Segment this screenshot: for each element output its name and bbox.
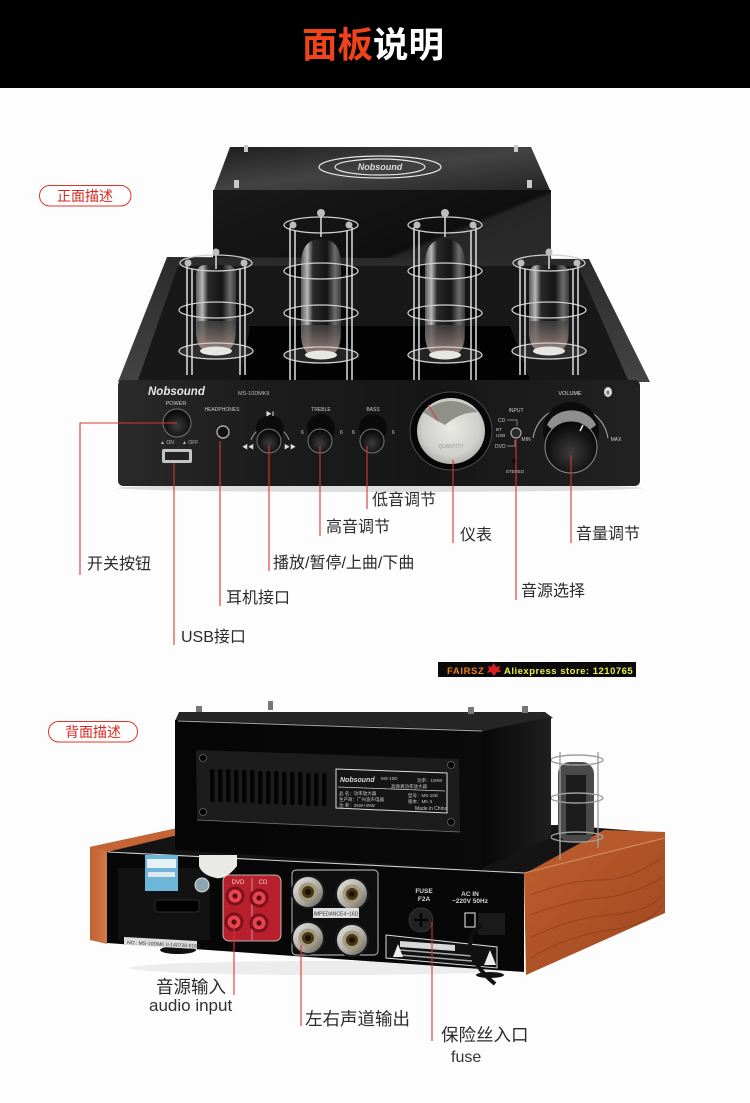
serial label: NO.: MS-10DMK II-140728-0163 (127, 940, 200, 950)
callout: speaker output: 左右声道输出 (305, 1009, 410, 1029)
nameplate: 型号：MS-10D (408, 792, 439, 799)
callout: treble: 高音调节 (326, 518, 390, 536)
rear panel (107, 852, 524, 972)
transformer front (175, 720, 482, 870)
callout: playback: 播放/暂停/上曲/下曲 (273, 554, 414, 572)
vacuum tube 2 (284, 209, 358, 380)
small tube (551, 752, 603, 860)
transformer box front (213, 190, 551, 326)
power knob (160, 401, 198, 446)
play knob: ▶‖ (266, 411, 274, 418)
input selector: USB (496, 433, 505, 438)
callout: fuse: 保险丝入口 (441, 1025, 528, 1045)
store banner (438, 662, 636, 677)
VU meter (410, 392, 492, 470)
handle slot (155, 900, 199, 912)
fuse holder (409, 888, 433, 932)
bass knob: BASS (366, 407, 380, 413)
nameplate: Nobsound (340, 777, 375, 784)
USB port (162, 449, 192, 463)
nameplate: 生产商：广州波声电器 (339, 796, 384, 803)
bluetooth badge (604, 387, 612, 397)
input selector: INPUT (508, 408, 524, 414)
input selector: DVD (495, 444, 506, 450)
callout: audio input: 音源输入 (156, 977, 226, 997)
input selector: BT (496, 427, 502, 432)
power cable (470, 925, 495, 984)
front amplifier photo (118, 145, 650, 492)
play knob: ◀◀ (242, 444, 254, 451)
transformer box top: Nobsound (358, 162, 403, 172)
rear amplifier photo (90, 701, 665, 984)
speaker terminals panel (291, 870, 378, 957)
callout: USB: USB接口 (181, 628, 246, 646)
callout: meter (453, 460, 492, 544)
play knob (242, 411, 296, 453)
bass knob: 6 (352, 430, 355, 436)
front panel: MS-10DMKII (238, 391, 270, 397)
volume knob: VOLUME (558, 391, 582, 397)
callout: meter: 仪表 (460, 526, 492, 544)
vacuum tube 3 (408, 209, 482, 380)
wood side right (524, 838, 665, 975)
vacuum tube 4 (512, 248, 586, 375)
callout: fuse: fuse (451, 1049, 481, 1066)
vent slots (210, 769, 326, 806)
nameplate: 版本：MK II (408, 798, 432, 805)
vent plate (196, 750, 460, 832)
AC inlet: AC IN (461, 891, 479, 898)
bluetooth badge: ʙ (606, 390, 610, 396)
VU meter: QUANTITY (438, 444, 464, 450)
front panel (118, 380, 640, 486)
treble knob: 6 (301, 430, 304, 436)
audio input panel (223, 875, 281, 941)
store banner: FAIRSZ (447, 666, 484, 677)
input selector: STEREO (506, 469, 525, 474)
shadow under amp (118, 484, 642, 492)
callout: volume (571, 455, 640, 543)
volume knob: MAX (611, 437, 622, 443)
callout: power button: 开关按钮 (87, 555, 151, 573)
callout: headphone jack: 耳机接口 (226, 589, 290, 607)
nameplate: 功率：100W (417, 777, 443, 784)
rear chassis top and wood (90, 825, 665, 873)
audio input panel: DVD (232, 880, 245, 886)
speaker terminals panel: IMPEDANCE4~16Ω (314, 912, 359, 918)
callout: audio input (149, 925, 234, 1015)
transformer top (175, 712, 553, 731)
nameplate: MS-10D (381, 776, 398, 781)
tag: rear description: 背面描述 (65, 724, 121, 740)
callout: treble (320, 446, 390, 536)
treble knob: TREBLE (311, 407, 331, 413)
callout: bass (367, 446, 436, 509)
volume knob: MIN (521, 437, 531, 443)
treble knob (301, 407, 343, 453)
audio input panel: CD (259, 880, 268, 886)
warning plate (386, 935, 497, 968)
nameplate: 高保真功率放大器 (391, 783, 427, 790)
top screws (196, 701, 528, 714)
feet (160, 946, 504, 978)
title: 面板说明 (302, 25, 444, 65)
headphones jack: HEADPHONES (204, 407, 240, 413)
floor shadow (130, 961, 530, 975)
callout: speaker output (301, 945, 410, 1029)
bass knob: 6 (392, 430, 395, 436)
callout: audio input: audio input (149, 996, 232, 1015)
tag: rear description (48, 722, 138, 742)
volume knob (521, 391, 622, 473)
bass knob (352, 407, 395, 453)
nameplate: 品 名：功率放大器 (339, 790, 377, 797)
AC inlet: ~220V 50Hz (452, 898, 489, 905)
transformer side (482, 717, 551, 868)
power knob: POWER (166, 401, 186, 407)
fuse holder: F2A (418, 896, 430, 903)
power knob: ▲ ON (160, 440, 174, 446)
vacuum tube 1 (179, 248, 253, 375)
tag: front description: 正面描述 (57, 188, 113, 204)
headphones jack (204, 407, 240, 438)
icon: maple leaf (487, 663, 501, 676)
round label (195, 878, 209, 892)
brand: Nobsound (148, 386, 206, 398)
nameplate (336, 769, 447, 813)
callout: fuse (432, 922, 528, 1066)
transformer box top (214, 145, 550, 190)
store banner: Aliexpress store: 1210765 (504, 666, 633, 677)
input selector: CD (498, 418, 506, 424)
play knob: ▶▶ (284, 444, 296, 451)
certification sticker (145, 855, 178, 891)
callout: power button (80, 423, 177, 575)
header band (0, 0, 750, 88)
treble knob: 6 (340, 430, 343, 436)
input selector (495, 408, 525, 474)
callout: input select: 音源选择 (521, 582, 585, 600)
power knob: ▲ OFF (182, 440, 198, 446)
chassis top (118, 257, 650, 382)
AC inlet (452, 891, 505, 935)
tag: front description (40, 186, 131, 206)
warranty seal (199, 855, 237, 878)
callout: volume: 音量调节 (576, 525, 640, 543)
nameplate: Made in China (415, 806, 447, 812)
callout: bass: 低音调节 (372, 491, 436, 509)
fuse holder: FUSE (415, 888, 433, 895)
nameplate: 功 率：25W+25W (339, 802, 376, 809)
wood side left (90, 847, 107, 944)
